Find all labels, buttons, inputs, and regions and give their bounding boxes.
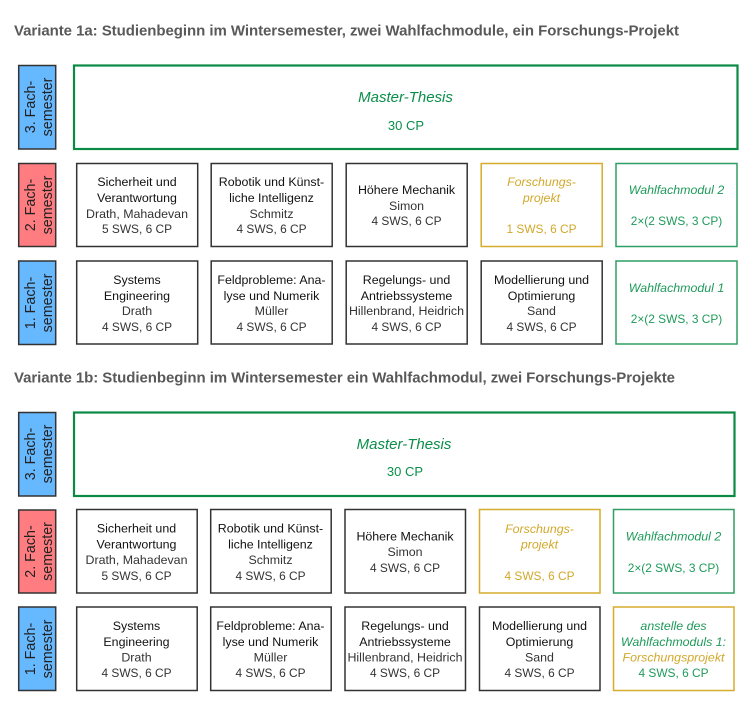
module: Regelungs- und Antriebssysteme (1b): Hillenbrand, Heidrich: [347, 650, 463, 664]
module: Regelungs- und Antriebssysteme (1a): 4 SWS, 6 CP: [371, 320, 442, 334]
module: Wahlfachmodul 2 (1b): [614, 510, 734, 593]
module: Modellierung und Optimierung (1a): Modellierung und: [494, 273, 589, 287]
module: Höhere Mechanik (1a): Simon: [389, 199, 424, 213]
module: Regelungs- und Antriebssysteme (1b): [345, 607, 466, 690]
module: Höhere Mechanik (1b): [345, 510, 466, 593]
module: Sicherheit und Verantwortung (1a): [77, 164, 198, 246]
semester label: 2. Fachsemester (1b): semester: [40, 522, 56, 581]
module: Feldprobleme (1b): lyse und Numerik: [223, 635, 319, 649]
module: Systems Engineering (1b): [77, 607, 197, 690]
panel: Master-Thesis (1a): [74, 66, 738, 149]
module: Höhere Mechanik (1b): Simon: [387, 545, 423, 559]
module: Systems Engineering (1a): Systems: [113, 273, 161, 287]
semester label: 1. Fachsemester (1b): 1. Fach-: [23, 623, 39, 675]
module: Forschungsprojekt (1a): [481, 164, 602, 246]
semester label: 3. Fachsemester (1a): [19, 66, 56, 149]
module: Feldprobleme (1a): Feldprobleme: Ana-: [217, 273, 326, 287]
module: Sicherheit und Verantwortung (1b): Sicherheit und: [97, 522, 176, 536]
module: Feldprobleme (1a): lyse und Numerik: [224, 289, 320, 303]
module: Höhere Mechanik (1a): Höhere Mechanik: [358, 183, 456, 197]
panel: Master-Thesis (1a): Master-Thesis: [358, 89, 453, 106]
module: Feldprobleme (1b): Feldprobleme: Ana-: [216, 619, 325, 633]
heading: Variante 1b: Variante 1b: Studienbeginn im Wintersemester ein Wahlfachmodul, zwei Forschungs-Projekte: [14, 370, 675, 386]
module: Sicherheit und Verantwortung (1a): Sicherheit und: [97, 175, 177, 189]
panel: Master-Thesis (1a): 30 CP: [388, 118, 424, 133]
module: Feldprobleme (1b): Müller: [254, 650, 287, 664]
semester label: 1. Fachsemester (1b): [19, 607, 56, 690]
module: Wahlfachmodul 1 (1a): 2×(2 SWS, 3 CP): [631, 312, 722, 326]
module: Systems Engineering (1b): 4 SWS, 6 CP: [101, 666, 172, 680]
module: Sicherheit und Verantwortung (1a): Drath, Mahadevan: [86, 207, 188, 221]
module: Höhere Mechanik (1a): 4 SWS, 6 CP: [371, 214, 442, 228]
module: Regelungs- und Antriebssysteme (1a): Hillenbrand, Heidrich: [349, 304, 464, 318]
module: Robotik und Künstliche Intelligenz (1b): Schmitz: [248, 553, 293, 567]
module: Robotik und Künstliche Intelligenz (1a): Robotik und Künst-: [219, 175, 324, 189]
module: Modellierung und Optimierung (1b): Optimierung: [506, 635, 573, 649]
module: Modellierung und Optimierung (1b): Sand: [525, 650, 554, 664]
module: Robotik und Künstliche Intelligenz (1b): Robotik und Künst-: [218, 522, 323, 536]
module: Sicherheit und Verantwortung (1b): Drath, Mahadevan: [86, 553, 188, 567]
module: Regelungs- und Antriebssysteme (1a): [346, 261, 467, 344]
module: Feldprobleme (1a): Müller: [255, 304, 288, 318]
module: Regelungs- und Antriebssysteme (1a): Regelungs- und: [363, 273, 450, 287]
module: Wahlfachmodul 2 (1a): Wahlfachmodul 2: [629, 183, 724, 197]
semester label: 3. Fachsemester (1a): semester: [40, 77, 56, 136]
module: Robotik und Künstliche Intelligenz (1a): Schmitz: [249, 207, 294, 221]
module: Robotik und Künstliche Intelligenz (1b): [211, 510, 331, 593]
semester label: 1. Fachsemester (1a): 1. Fach-: [23, 277, 39, 329]
module: anstelle des Wahlfachmoduls 1 (1b): Forschungsprojekt: [623, 650, 725, 664]
panel: Master-Thesis (1b): [74, 412, 734, 496]
module: Systems Engineering (1b): Systems: [113, 619, 160, 633]
module: Robotik und Künstliche Intelligenz (1a): liche Intelligenz: [229, 191, 314, 205]
module: Regelungs- und Antriebssysteme (1a): Antriebssysteme: [361, 289, 452, 303]
semester label: 2. Fachsemester (1a): semester: [40, 175, 56, 234]
heading: Variante 1a: Variante 1a: Studienbeginn im Wintersemester, zwei Wahlfachmodule, ein Forschungs-Projekt: [14, 22, 679, 40]
module: Forschungsprojekt (1b): Forschungs-: [505, 522, 574, 536]
semester label: 2. Fachsemester (1b): 2. Fach-: [23, 525, 39, 578]
module: Robotik und Künstliche Intelligenz (1b): 4 SWS, 6 CP: [235, 569, 306, 583]
module: Wahlfachmodul 2 (1b): 2×(2 SWS, 3 CP): [628, 561, 719, 575]
module: Modellierung und Optimierung (1a): 4 SWS, 6 CP: [506, 320, 577, 334]
module: Forschungsprojekt (1b): projekt: [520, 538, 559, 552]
semester label: 2. Fachsemester (1a): [19, 164, 56, 246]
module: Höhere Mechanik (1b): Höhere Mechanik: [356, 530, 454, 544]
module: Forschungsprojekt (1a): 1 SWS, 6 CP: [506, 222, 577, 236]
module: Forschungsprojekt (1a): Forschungs-: [507, 175, 576, 189]
module: Forschungsprojekt (1b): 4 SWS, 6 CP: [504, 569, 575, 583]
semester label: 3. Fachsemester (1b): [19, 412, 56, 496]
module: Modellierung und Optimierung (1b): 4 SWS, 6 CP: [504, 666, 575, 680]
module: Sicherheit und Verantwortung (1a): Verantwortung: [97, 191, 177, 205]
module: Feldprobleme (1b): [211, 607, 331, 690]
semester label: 1. Fachsemester (1a): semester: [40, 273, 56, 332]
module: Modellierung und Optimierung (1b): [480, 607, 600, 690]
module: Robotik und Künstliche Intelligenz (1a): [211, 164, 332, 246]
module: Forschungsprojekt (1b): [480, 510, 600, 593]
module: Feldprobleme (1b): 4 SWS, 6 CP: [235, 666, 306, 680]
module: Sicherheit und Verantwortung (1b): 5 SWS, 6 CP: [101, 569, 172, 583]
module: Modellierung und Optimierung (1a): [481, 261, 602, 344]
semester label: 1. Fachsemester (1b): semester: [40, 619, 56, 678]
module: Höhere Mechanik (1a): [346, 164, 467, 246]
semester label: 3. Fachsemester (1b): 3. Fach-: [23, 428, 39, 480]
module: Systems Engineering (1a): Drath: [122, 304, 152, 318]
module: Systems Engineering (1a): [77, 261, 198, 344]
module: Robotik und Künstliche Intelligenz (1b): liche Intelligenz: [228, 538, 313, 552]
module: Feldprobleme (1a): 4 SWS, 6 CP: [236, 320, 307, 334]
module: Wahlfachmodul 1 (1a): [616, 261, 737, 344]
module: anstelle des Wahlfachmoduls 1 (1b): Wahlfachmoduls 1:: [621, 635, 726, 649]
module: Wahlfachmodul 1 (1a): Wahlfachmodul 1: [629, 281, 724, 295]
module: Regelungs- und Antriebssysteme (1b): Antriebssysteme: [359, 635, 451, 649]
module: Robotik und Künstliche Intelligenz (1a): 4 SWS, 6 CP: [236, 222, 307, 236]
semester label: 3. Fachsemester (1a): 3. Fach-: [23, 81, 39, 133]
module: anstelle des Wahlfachmoduls 1 (1b): [614, 607, 734, 690]
module: Modellierung und Optimierung (1b): Modellierung und: [492, 619, 587, 633]
module: Sicherheit und Verantwortung (1b): Verantwortung: [97, 538, 177, 552]
semester label: 2. Fachsemester (1a): 2. Fach-: [23, 179, 39, 231]
semester label: 3. Fachsemester (1b): semester: [40, 424, 56, 483]
module: Feldprobleme (1a): [211, 261, 332, 344]
module: Forschungsprojekt (1a): projekt: [522, 191, 561, 205]
module: Systems Engineering (1a): Engineering: [104, 289, 170, 303]
module: Höhere Mechanik (1b): 4 SWS, 6 CP: [370, 561, 440, 575]
module: Wahlfachmodul 2 (1b): Wahlfachmodul 2: [626, 530, 721, 544]
module: Systems Engineering (1a): 4 SWS, 6 CP: [102, 320, 172, 334]
module: Wahlfachmodul 2 (1a): 2×(2 SWS, 3 CP): [631, 214, 722, 228]
module: Regelungs- und Antriebssysteme (1b): Regelungs- und: [361, 619, 449, 633]
module: anstelle des Wahlfachmoduls 1 (1b): anstelle des: [640, 619, 707, 633]
module: Modellierung und Optimierung (1a): Optimierung: [508, 289, 575, 303]
module: Sicherheit und Verantwortung (1a): 5 SWS, 6 CP: [102, 222, 172, 236]
panel: Master-Thesis (1b): Master-Thesis: [357, 436, 452, 453]
module: Sicherheit und Verantwortung (1b): [77, 510, 197, 593]
semester label: 1. Fachsemester (1a): [19, 261, 56, 344]
panel: Master-Thesis (1b): 30 CP: [387, 464, 423, 479]
module: Systems Engineering (1b): Drath: [121, 650, 152, 664]
semester label: 2. Fachsemester (1b): [19, 510, 56, 593]
module: anstelle des Wahlfachmoduls 1 (1b): 4 SWS, 6 CP: [638, 666, 709, 680]
module: Systems Engineering (1b): Engineering: [103, 635, 170, 649]
module: Regelungs- und Antriebssysteme (1b): 4 SWS, 6 CP: [370, 666, 440, 680]
module: Wahlfachmodul 2 (1a): [616, 164, 737, 246]
module: Modellierung und Optimierung (1a): Sand: [527, 304, 556, 318]
